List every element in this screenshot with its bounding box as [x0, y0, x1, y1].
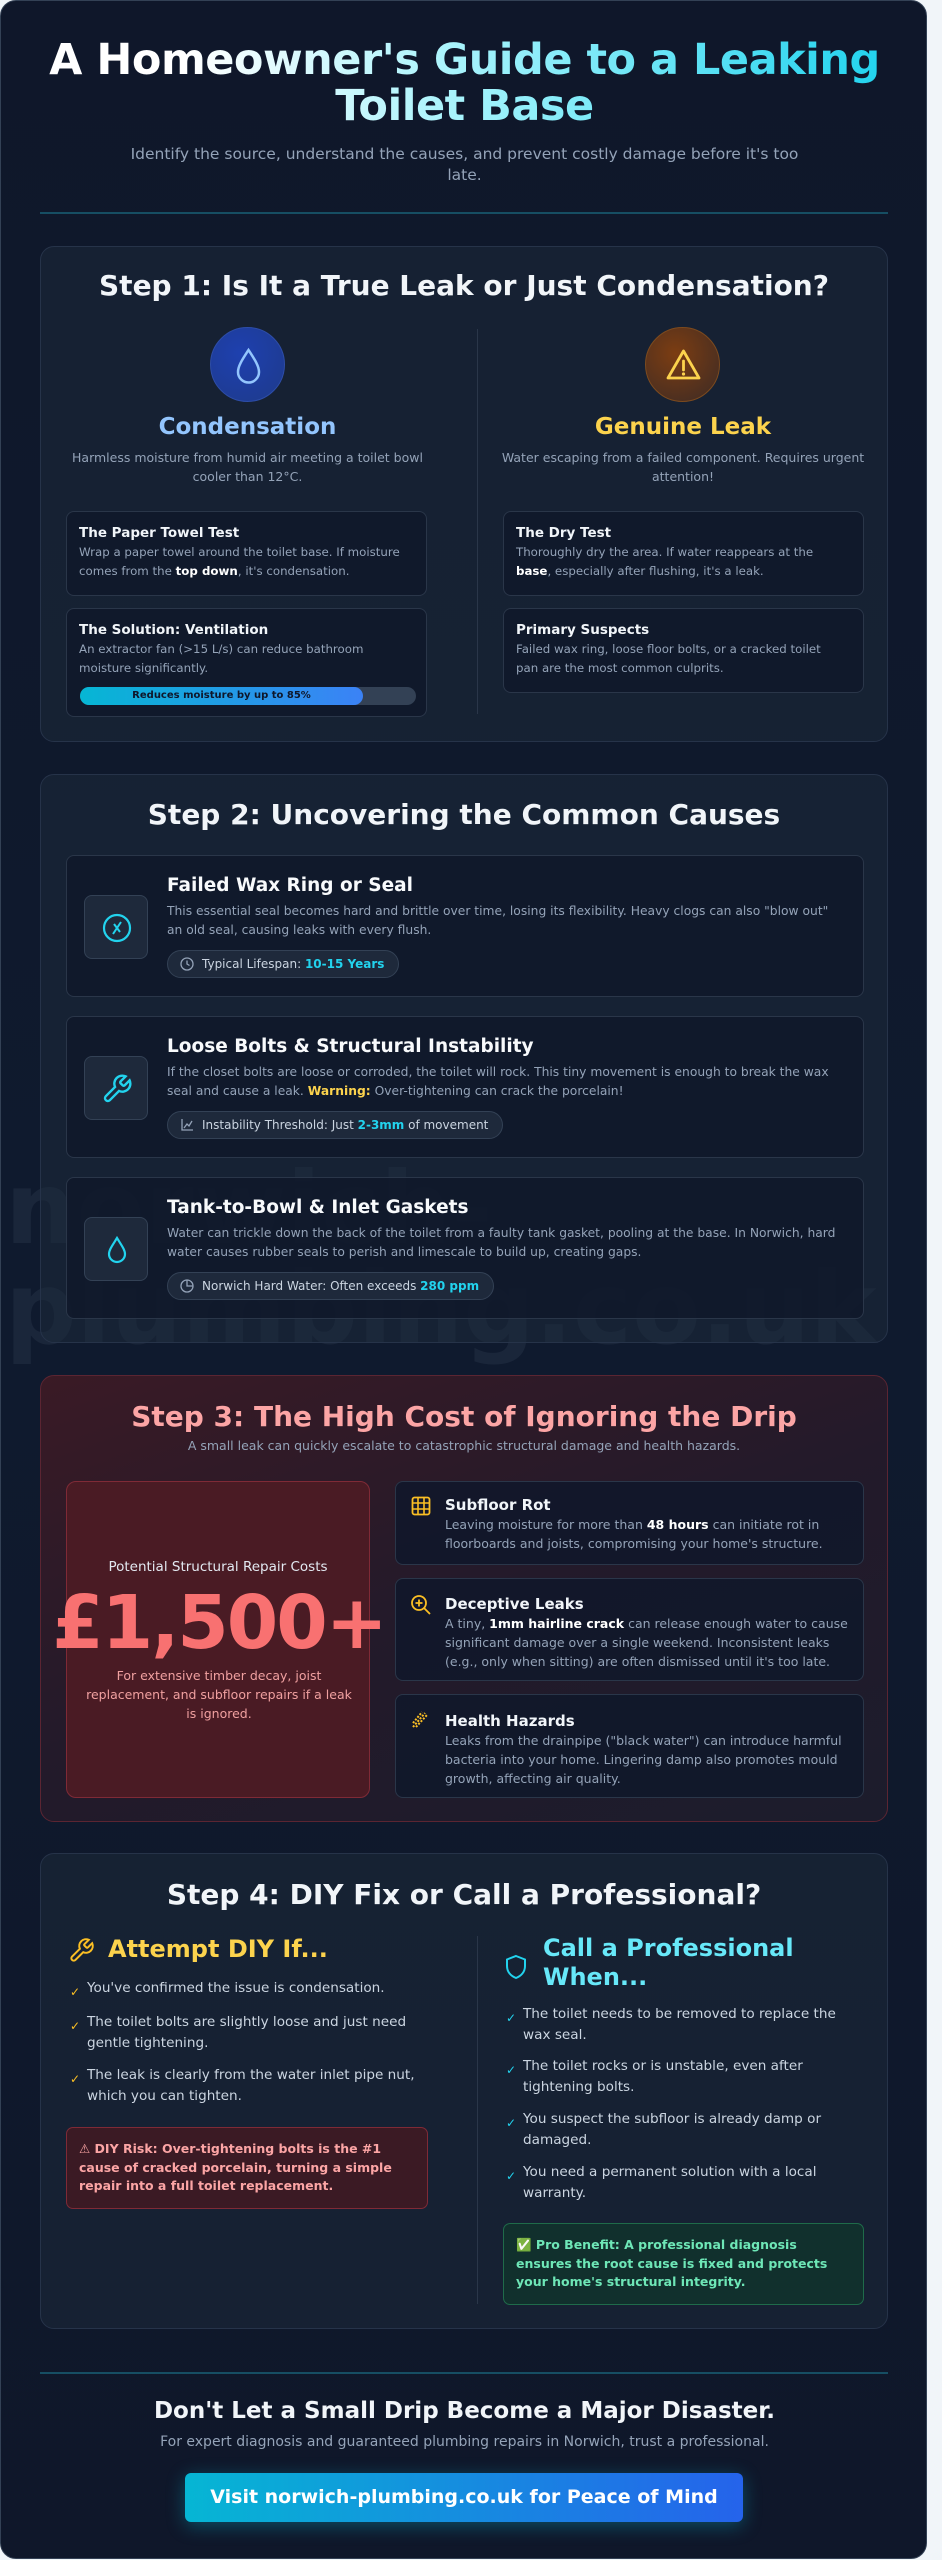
icon: bacteria: [412, 1711, 428, 1728]
progress bar: [80, 687, 416, 705]
subtitle: step 3: A small leak can quickly escalate to catastrophic structural damage and health hazards.: [188, 1438, 740, 1453]
watermark: plumbing.co.uk: [5, 1250, 877, 1367]
pill: hard water: Norwich Hard Water: Often exceeds 280 ppm: [202, 1279, 479, 1293]
heading: step 4: Step 4: DIY Fix or Call a Professional?: [167, 1878, 761, 1911]
box: primary suspects: Primary Suspects: [516, 622, 649, 638]
footer heading: Don't Let a Small Drip Become a Major Disaster.: [154, 2398, 775, 2424]
card: deceptive leaks: Deceptive Leaks: [445, 1595, 584, 1613]
list: DIY conditions: [70, 1980, 415, 2104]
card: health hazards: [395, 1694, 864, 1798]
stat box: cost: Potential Structural Repair Costs: [108, 1559, 328, 1575]
pill: threshold: [167, 1111, 503, 1139]
card: gaskets: [66, 1177, 864, 1319]
subtitle: Identify the source, understand the causes, and prevent costly damage before it's too late.: [131, 145, 798, 184]
callout: DIY risk: [66, 2127, 428, 2209]
list: professional conditions: You suspect the subfloor is already damp or damaged.: [523, 2111, 821, 2148]
card: loose bolts: [66, 1016, 864, 1158]
card: subfloor rot: Leaving moisture for more than 48 hours can initiate rot in floorboards and joists, compromising your home's structure.: [445, 1517, 823, 1551]
box: ventilation: [66, 608, 427, 717]
heading: step 1: Step 1: Is It a True Leak or Just Condensation?: [99, 269, 829, 302]
callout: pro benefit: [503, 2223, 864, 2305]
panel: step 2: [40, 774, 888, 1343]
card: deceptive leaks: A tiny, 1mm hairline crack can release enough water to cause significant damage over a single weekend. Inconsistent leaks (e.g., only when sitting) are often dismissed until it's too late.: [445, 1616, 848, 1669]
panel: step 4: ✓: [70, 2072, 80, 2086]
panel: step 4: ✓: [70, 1985, 80, 1999]
pill: lifespan: Typical Lifespan: 10-15 Years: [202, 957, 384, 971]
panel: step 4: ✓: [70, 2019, 80, 2033]
list: professional conditions: [506, 2006, 836, 2201]
box: dry test: [503, 511, 864, 596]
pill: hard water: [167, 1272, 494, 1300]
heading: condensation: Condensation: [159, 414, 336, 440]
box: primary suspects: [503, 608, 864, 693]
list: professional conditions: The toilet rocks or is unstable, even after tightening bolts.: [523, 2058, 803, 2095]
card: gaskets: Tank-to-Bowl & Inlet Gaskets: [167, 1197, 468, 1218]
icon: wrench: [84, 1056, 148, 1120]
box: dry test: Thoroughly dry the area. If water reappears at the base, especially after flushing, it's a leak.: [516, 545, 813, 578]
pill: threshold: Instability Threshold: Just 2-3mm of movement: [202, 1118, 488, 1132]
icon: drop: [84, 1217, 148, 1281]
watermark: norwich-: [5, 1150, 493, 1267]
icon: grid: [412, 1496, 430, 1516]
heading: call professional: Call a Professional When...: [543, 1934, 794, 1991]
list: DIY conditions: You've confirmed the issue is condensation.: [87, 1980, 385, 1996]
box: ventilation: An extractor fan (>15 L/s) can reduce bathroom moisture significantly.: [79, 642, 363, 674]
heading: step 3: Step 3: The High Cost of Ignoring the Drip: [131, 1400, 797, 1433]
card: wax ring: This essential seal becomes hard and brittle over time, losing its flexibility. Heavy clogs can also "blow out" an old seal, causing leaks with every flush.: [167, 904, 828, 937]
icon: seal: [84, 895, 148, 959]
card: loose bolts: Loose Bolts & Structural Instability: [167, 1036, 534, 1057]
card: loose bolts: If the closet bolts are loose or corroded, the toilet will rock. This tiny movement is enough to break the wax seal and cause a leak. Warning: Over-tightening can crack the porcelain!: [167, 1065, 829, 1098]
heading: genuine leak: Genuine Leak: [595, 414, 771, 440]
box: paper towel test: Wrap a paper towel around the toilet base. If moisture comes from the top down, it's condensation.: [79, 545, 400, 578]
title: Toilet Base: [335, 81, 594, 131]
stat box: cost: [66, 1481, 370, 1798]
card: wax ring: Failed Wax Ring or Seal: [167, 875, 413, 896]
list: DIY conditions: The toilet bolts are slightly loose and just need gentle tightening.: [87, 2014, 406, 2051]
icon: warning: [645, 327, 720, 402]
heading: attempt DIY: [70, 1935, 328, 1963]
card: gaskets: Water can trickle down the back of the toilet from a faulty tank gasket, pooling at the base. In Norwich, hard water causes rubber seals to perish and limescale to build up, creating gaps.: [167, 1226, 835, 1259]
panel: step 4: ✓: [506, 2063, 516, 2077]
icon: condensation drop: [210, 327, 285, 402]
footer subtext: For expert diagnosis and guaranteed plumbing repairs in Norwich, trust a professional.: [160, 2434, 769, 2450]
box: primary suspects: Failed wax ring, loose floor bolts, or a cracked toilet pan are the most common culprits.: [516, 642, 821, 674]
callout: pro benefit: ✅ Pro Benefit: A professional diagnosis ensures the root cause is fixed and protects your home's structural integrity.: [516, 2237, 827, 2289]
watermark: [5, 1150, 878, 1367]
heading: step 2: Step 2: Uncovering the Common Causes: [148, 798, 780, 831]
panel: step 4: [40, 1853, 888, 2329]
panel: step 4: ✓: [506, 2011, 516, 2025]
callout: DIY risk: ⚠ DIY Risk: Over-tightening bolts is the #1 cause of cracked porcelain, turning a simple repair into a full toilet replacement.: [79, 2141, 392, 2193]
progress bar: Reduces moisture by up to 85%: [132, 690, 311, 701]
list: professional conditions: The toilet needs to be removed to replace the wax seal.: [523, 2006, 836, 2043]
title: A Homeowner's Guide to a Leaking: [49, 35, 880, 85]
title: [1, 37, 928, 129]
panel: step 4: ✓: [506, 2116, 516, 2130]
text: leak desc: Water escaping from a failed component. Requires urgent attention!: [502, 450, 864, 484]
box: dry test: The Dry Test: [516, 525, 611, 541]
list: DIY conditions: The leak is clearly from the water inlet pipe nut, which you can tighten.: [87, 2067, 415, 2104]
pill: lifespan: [167, 950, 399, 978]
box: paper towel test: The Paper Towel Test: [79, 525, 239, 541]
box: paper towel test: [66, 511, 427, 596]
card: deceptive leaks: [395, 1578, 864, 1681]
card: subfloor rot: [395, 1481, 864, 1565]
card: health hazards: Health Hazards: [445, 1712, 575, 1730]
panel: step 1: [40, 246, 888, 742]
icon: magnifier: [411, 1595, 431, 1615]
list: professional conditions: You need a permanent solution with a local warranty.: [523, 2164, 816, 2201]
CTA button: Visit norwich-plumbing.co.uk for Peace of Mind: [210, 2486, 718, 2508]
box: ventilation: The Solution: Ventilation: [79, 622, 268, 638]
CTA button: [185, 2473, 743, 2522]
card: subfloor rot: Subfloor Rot: [445, 1496, 551, 1514]
card: health hazards: Leaks from the drainpipe ("black water") can introduce harmful bacteria into your home. Lingering damp also promotes mould growth, affecting air quality.: [445, 1733, 842, 1786]
panel: step 3: [40, 1375, 888, 1822]
stat box: cost: For extensive timber decay, joist replacement, and subfloor repairs if a leak is ignored.: [86, 1668, 352, 1721]
panel: step 4: Attempt DIY If...: [108, 1935, 328, 1963]
text: condensation desc: Harmless moisture from humid air meeting a toilet bowl cooler than 12°C.: [72, 450, 423, 484]
panel: step 4: ✓: [506, 2169, 516, 2183]
card: wax ring: [66, 855, 864, 997]
big number: £1,500+: [52, 1580, 386, 1666]
